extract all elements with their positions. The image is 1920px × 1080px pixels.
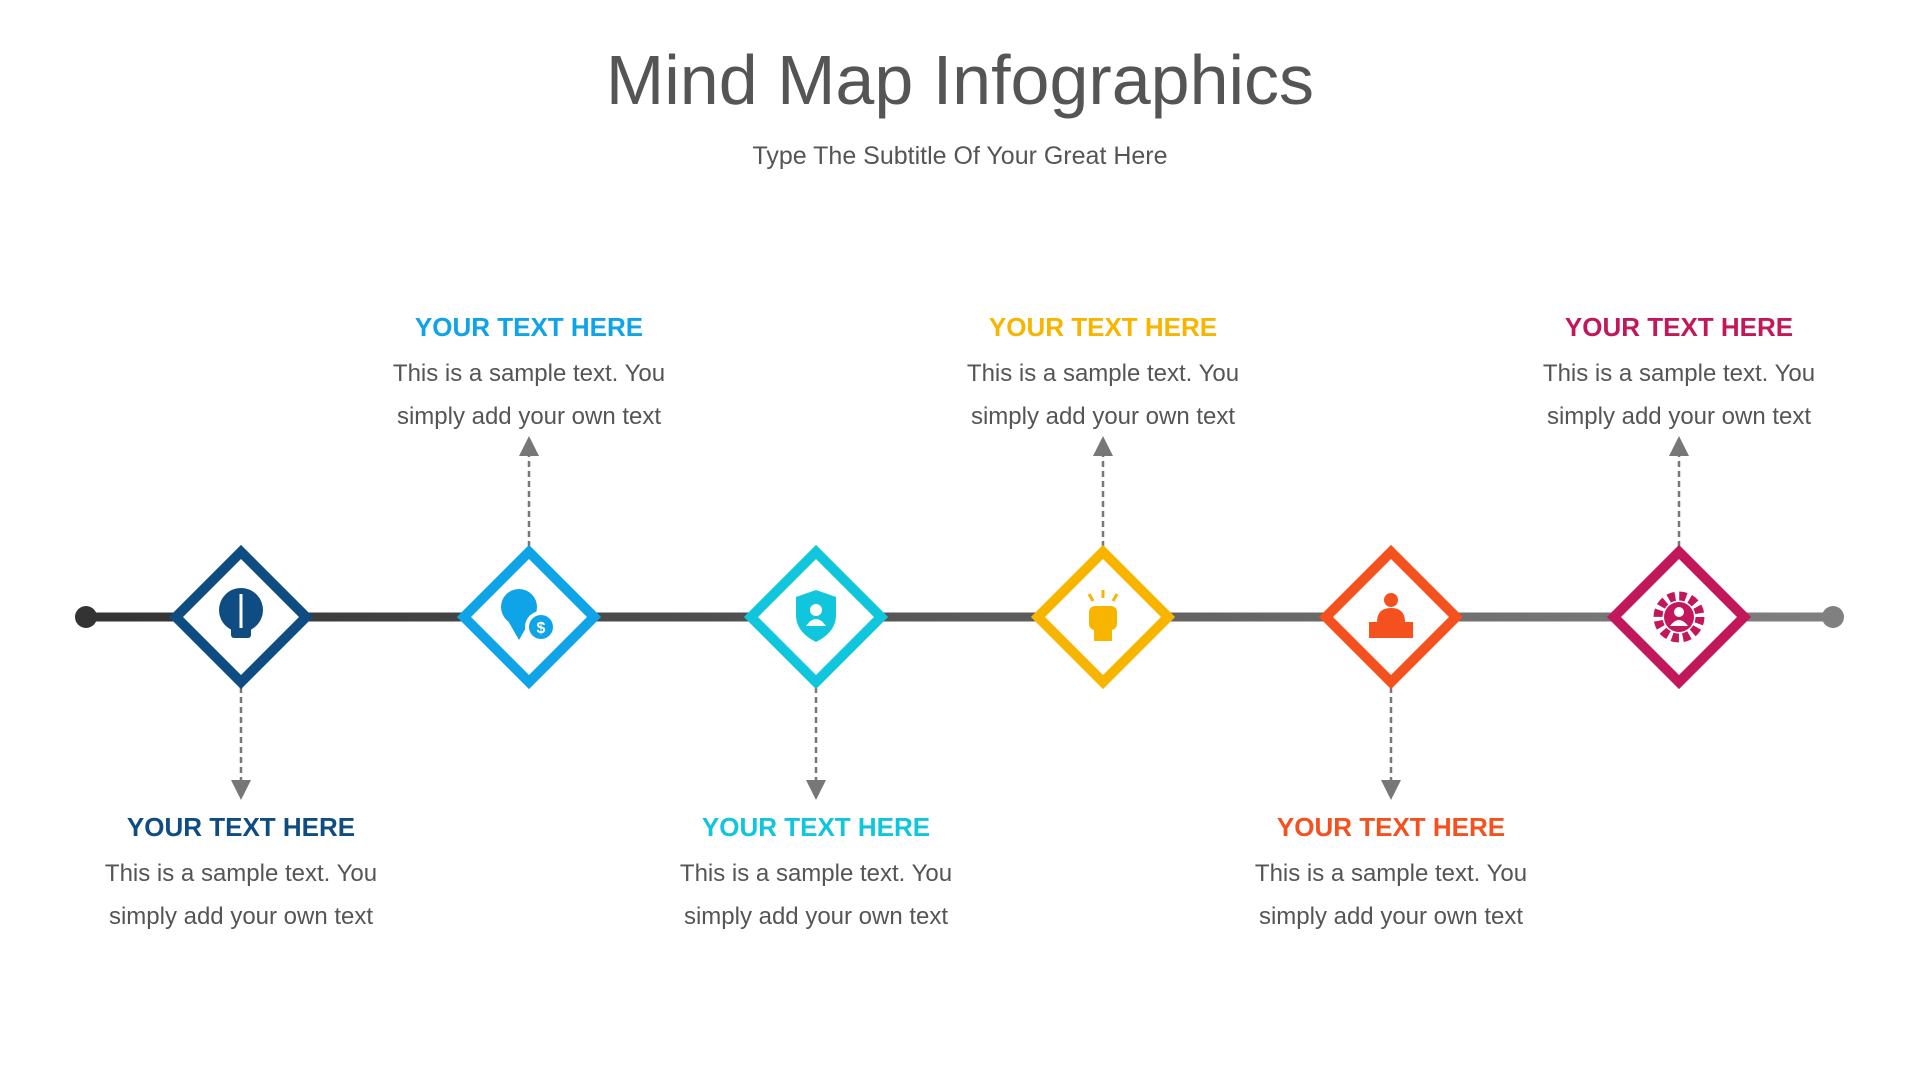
subtitle: Type The Subtitle Of Your Great Here xyxy=(752,142,1168,170)
text block 3 (bottom): This is a sample text. You xyxy=(680,860,952,887)
text block 1 (bottom) xyxy=(105,812,377,930)
text block 4 (top): This is a sample text. You xyxy=(967,360,1239,387)
text block 3 (bottom): YOUR TEXT HERE xyxy=(702,812,930,842)
text block 4 (top): YOUR TEXT HERE xyxy=(989,312,1217,342)
step 5 diamond: presenter xyxy=(1326,552,1456,682)
text block 2 (top): simply add your own text xyxy=(397,403,661,430)
text block 5 (bottom) xyxy=(1255,812,1527,930)
title: Mind Map Infographics xyxy=(606,41,1314,119)
text block 2 (top): This is a sample text. You xyxy=(393,360,665,387)
step 3 diamond: shield xyxy=(751,552,881,682)
text block 5 (bottom): simply add your own text xyxy=(1259,903,1523,930)
text block 6 (top): YOUR TEXT HERE xyxy=(1565,312,1793,342)
step 4 diamond: fist idea xyxy=(1038,552,1168,682)
text block 5 (bottom): YOUR TEXT HERE xyxy=(1277,812,1505,842)
arrows xyxy=(241,446,1679,790)
text block 3 (bottom): simply add your own text xyxy=(684,903,948,930)
text block 6 (top): This is a sample text. You xyxy=(1543,360,1815,387)
text block 5 (bottom): This is a sample text. You xyxy=(1255,860,1527,887)
text block 2 (top) xyxy=(393,312,665,430)
text block 6 (top): simply add your own text xyxy=(1547,403,1811,430)
text block 1 (bottom): This is a sample text. You xyxy=(105,860,377,887)
text block 2 (top): YOUR TEXT HERE xyxy=(415,312,643,342)
step 1 diamond: brain xyxy=(176,552,306,682)
text block 1 (bottom): simply add your own text xyxy=(109,903,373,930)
text block 4 (top) xyxy=(967,312,1239,430)
text block 1 (bottom): YOUR TEXT HERE xyxy=(127,812,355,842)
timeline line xyxy=(75,606,1844,628)
step 2 diamond: location money xyxy=(464,552,594,682)
step 6 diamond: gear person xyxy=(1614,552,1744,682)
text block 4 (top): simply add your own text xyxy=(971,403,1235,430)
step 2 diamond: location money: $ xyxy=(537,620,546,637)
text block 3 (bottom) xyxy=(680,812,952,930)
text block 6 (top) xyxy=(1543,312,1815,430)
